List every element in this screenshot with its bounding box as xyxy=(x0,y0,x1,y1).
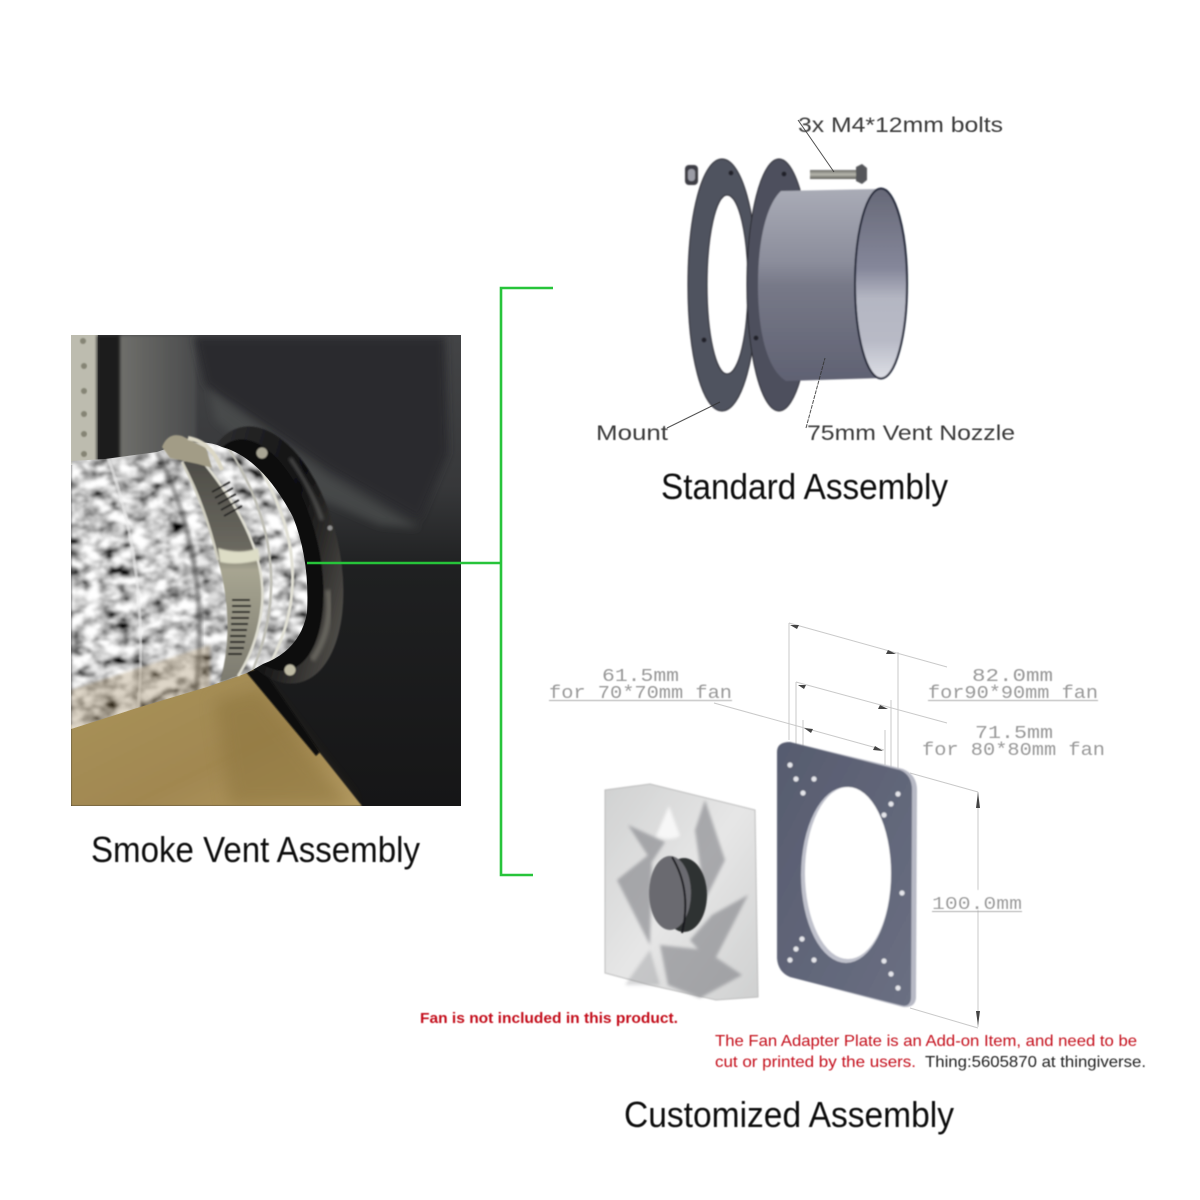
mounting flange xyxy=(216,426,344,684)
dimension labels: 61.5mm xyxy=(602,667,679,687)
mount ring xyxy=(688,159,757,411)
note: fan adapter plate: The Fan Adapter Plate is an Add-on Item, and need to be xyxy=(715,1033,1137,1050)
labels: standard assembly: 3x M4*12mm bolts xyxy=(798,114,1003,137)
dimension labels: 100.0mm xyxy=(932,895,1022,915)
diagram: standard assembly xyxy=(685,159,907,411)
plate centre opening xyxy=(801,787,891,963)
photo: smoke vent assembly xyxy=(71,335,461,806)
nozzle flange ring xyxy=(747,159,811,411)
diagram: fan adapter plate xyxy=(777,742,917,1007)
dimension labels: 71.5mm xyxy=(975,724,1053,744)
dimension labels: 82.0mm xyxy=(972,667,1053,687)
leader lines xyxy=(667,120,834,428)
dimension arrows xyxy=(790,625,980,1026)
ring holes xyxy=(702,170,786,342)
vent nozzle cylinder xyxy=(758,189,881,381)
note: fan adapter plate xyxy=(715,1033,1146,1071)
labels: standard assembly: Mount xyxy=(596,422,668,445)
box edge xyxy=(246,668,320,756)
hose clamp xyxy=(162,435,262,682)
note: fan adapter plate: Thing:5605870 at thingiverse. xyxy=(925,1054,1146,1071)
green bracket connector xyxy=(307,288,553,875)
heading: standard assembly: Standard Assembly xyxy=(661,466,948,507)
dimension lines xyxy=(714,623,978,1028)
dimension labels: for90*90mm fan xyxy=(928,684,1098,704)
wood floor xyxy=(71,665,362,806)
nut xyxy=(685,165,698,185)
foil hose xyxy=(71,442,308,729)
dimension labels: for 70*70mm fan xyxy=(549,684,732,704)
labels: standard assembly: 75mm Vent Nozzle xyxy=(807,422,1015,445)
shelf: perforated upright xyxy=(71,335,196,465)
nozzle opening xyxy=(855,188,907,378)
heading: smoke vent assembly: Smoke Vent Assembly xyxy=(91,829,420,870)
note: fan adapter plate: cut or printed by the users. xyxy=(715,1054,916,1071)
fan hub xyxy=(649,856,707,933)
heading: customized assembly: Customized Assembly xyxy=(624,1094,954,1135)
dimension labels: for 80*80mm fan xyxy=(922,741,1105,761)
fan blades xyxy=(617,800,748,998)
labels: standard assembly xyxy=(596,114,1015,445)
dimension labels xyxy=(549,667,1105,915)
note: fan not included: Fan is not included in this product. xyxy=(420,1010,678,1027)
bolt xyxy=(810,164,867,184)
diagram: fan xyxy=(605,784,758,1000)
plate mounting holes xyxy=(787,762,905,991)
foam block xyxy=(194,337,448,528)
